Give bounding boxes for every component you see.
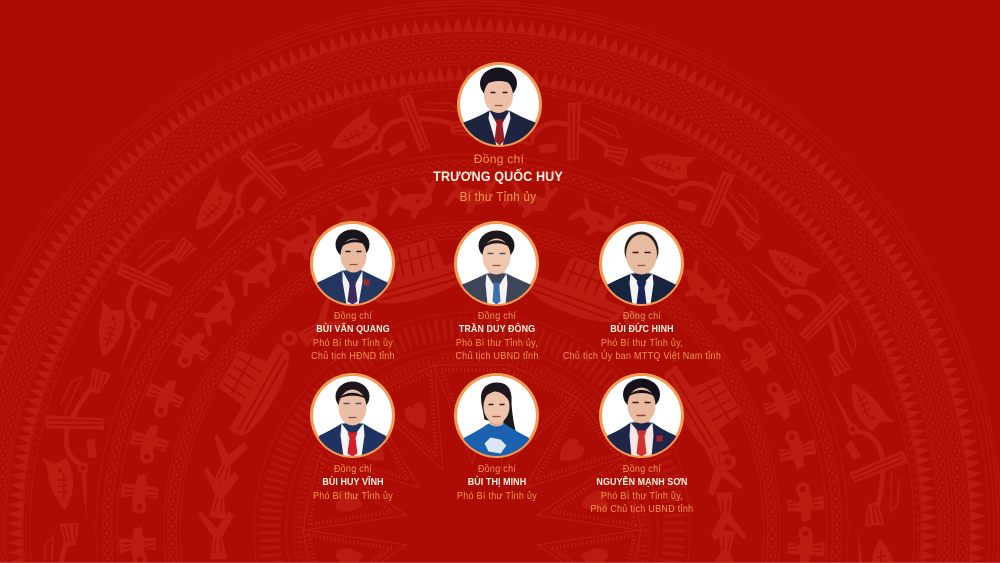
name: Bùi Đức Hinh: BÙI ĐỨC HINH: [610, 324, 673, 335]
portrait: Bùi Đức Hinh: [599, 221, 684, 306]
role line 2: Phó Chủ tịch UBND tỉnh: [590, 504, 693, 515]
portrait: Trương Quốc Huy: [457, 62, 542, 147]
card: Bùi Đức Hinh: [562, 221, 721, 362]
label: Đồng chí: Đồng chí: [477, 464, 516, 475]
label: Đồng chí: Đồng chí: [622, 464, 661, 475]
card: Bùi Văn Quang: [310, 221, 395, 362]
card: Bùi Thị Minh: [454, 373, 539, 502]
name: Bùi Thị Minh: BÙI THỊ MINH: [467, 477, 526, 488]
portrait: Bùi Huy Vĩnh: [310, 373, 395, 458]
role line 1: Phó Bí thư Tỉnh ủy,: [455, 338, 538, 349]
role line 1: Phó Bí thư Tỉnh ủy: [312, 338, 393, 349]
name: Nguyễn Mạnh Sơn: NGUYỄN MẠNH SƠN: [596, 477, 687, 488]
role: Phó Bí thư Tỉnh ủy: [456, 491, 537, 502]
role: Phó Bí thư Tỉnh ủy: [312, 491, 393, 502]
name: Bùi Huy Vĩnh: BÙI HUY VĨNH: [322, 477, 383, 488]
role line 1: Phó Bí thư Tỉnh ủy,: [600, 338, 683, 349]
portrait: Bùi Văn Quang: [310, 221, 395, 306]
card: Trần Duy Đông: [454, 221, 539, 362]
role: Bí thư Tỉnh ủy: [460, 190, 536, 204]
role line 2: Chủ tịch UBND tỉnh: [455, 351, 538, 362]
card: Bùi Huy Vĩnh: [310, 373, 395, 502]
portrait: Bùi Thị Minh: [454, 373, 539, 458]
role line 2: Chủ tịch Ủy ban MTTQ Việt Nam tỉnh: [562, 351, 721, 362]
role line 2: Chủ tịch HĐND tỉnh: [311, 351, 394, 362]
role line 1: Phó Bí thư Tỉnh ủy,: [600, 491, 683, 502]
label: Đồng chí: Đồng chí: [477, 311, 516, 322]
label: Đồng chí: Đồng chí: [333, 464, 372, 475]
label: Đồng chí: Đồng chí: [474, 152, 524, 166]
portrait: Trần Duy Đông: [454, 221, 539, 306]
portrait: Nguyễn Mạnh Sơn: [599, 373, 684, 458]
card: Nguyễn Mạnh Sơn: [590, 373, 693, 515]
label: Đồng chí: Đồng chí: [333, 311, 372, 322]
label: Đồng chí: Đồng chí: [622, 311, 661, 322]
name: Trương Quốc Huy: TRƯƠNG QUỐC HUY: [433, 168, 563, 184]
name: Bùi Văn Quang: BÙI VĂN QUANG: [316, 324, 389, 335]
name: Trần Duy Đông: TRẦN DUY ĐÔNG: [458, 324, 535, 335]
card: Trương Quốc Huy: [433, 62, 563, 204]
